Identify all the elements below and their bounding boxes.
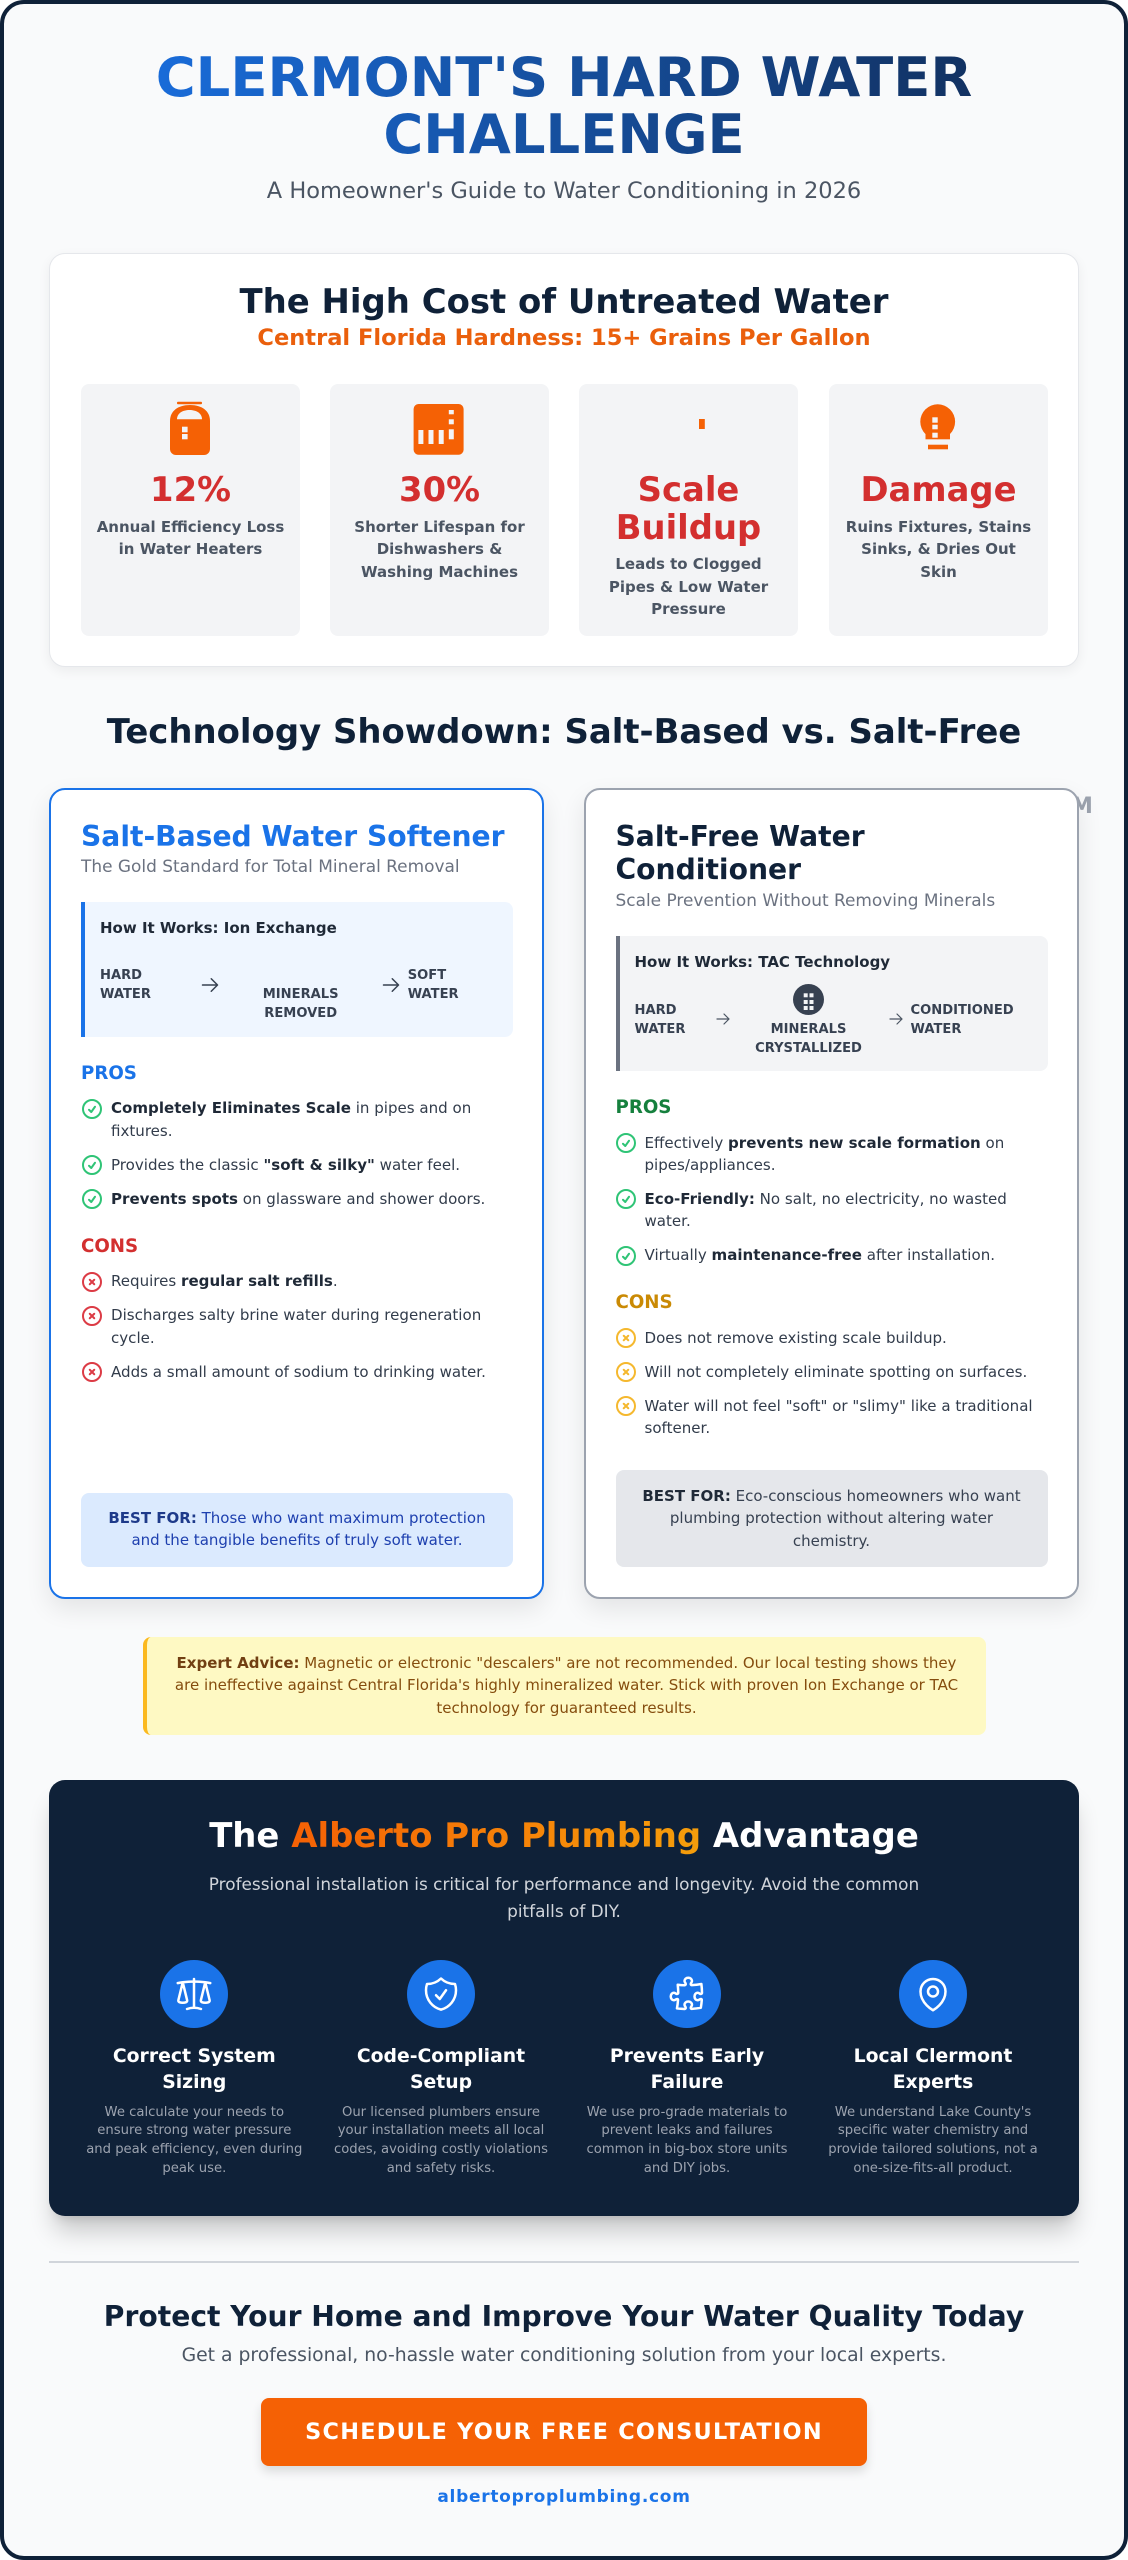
intro text: pitfalls of DIY.	[507, 1901, 621, 1921]
arrow	[716, 1013, 730, 1025]
feature text: We understand Lake County's	[835, 2104, 1031, 2120]
feature text: and peak efficiency, even during	[86, 2142, 302, 2157]
feature: code compliant	[334, 1960, 548, 2176]
description: Washing Machines	[361, 563, 518, 581]
con item	[616, 1396, 1033, 1437]
feature title	[820, 2044, 1046, 2096]
best for callout: BEST FOR: Those who want maximum protection	[108, 1509, 486, 1527]
flow step: hard water	[634, 1003, 686, 1037]
feature text: specific water chemistry and	[838, 2123, 1028, 2138]
card title: Conditioner	[616, 853, 801, 886]
icon: scale	[160, 1960, 228, 2028]
flow step: soft water: SOFT	[408, 968, 446, 983]
value: Buildup	[616, 508, 761, 547]
description: Shorter Lifespan for	[354, 518, 525, 536]
feature title: Code-Compliant	[357, 2046, 525, 2066]
description: Pipes & Low Water	[609, 578, 768, 596]
feature title	[574, 2044, 800, 2096]
clipped letter behind card: M	[1071, 794, 1093, 819]
feature text: codes, avoiding costly violations	[334, 2142, 548, 2157]
feature title: Correct System	[113, 2046, 276, 2066]
icon: pipe mark	[699, 419, 705, 429]
arrow	[382, 978, 400, 992]
stat: shorter lifespan	[330, 384, 549, 636]
description: in Water Heaters	[119, 540, 262, 558]
description: Skin	[920, 563, 957, 581]
flow step: hard water: HARD	[100, 968, 142, 983]
panel: advantage	[49, 1780, 1079, 2216]
description: Leads to Clogged	[615, 555, 762, 573]
feature text: and safety risks.	[387, 2161, 495, 2176]
feature text: your installation meets all local	[338, 2123, 544, 2138]
how it works title: How It Works: TAC Technology	[634, 953, 890, 971]
pro item: Eco-Friendly: No salt, no electricity, no wasted	[644, 1190, 1007, 1208]
flow step: minerals removed: REMOVED	[264, 1006, 337, 1021]
how it works title: How It Works: Ion Exchange	[100, 919, 337, 937]
feature text	[86, 2104, 302, 2176]
feature title	[113, 2046, 276, 2093]
feature: local experts	[820, 1960, 1046, 2192]
feature text	[328, 2104, 554, 2179]
icon: water heater	[170, 402, 210, 455]
description: Sinks, & Dries Out	[861, 540, 1016, 558]
call to action	[49, 2290, 1079, 2520]
value	[616, 470, 761, 547]
flow step: hard water: HARD	[634, 1003, 677, 1018]
cta text: Get a professional, no-hassle water conditioning solution from your local experts.	[182, 2345, 946, 2366]
flow step: minerals removed	[263, 987, 339, 1021]
best for callout	[616, 1470, 1048, 1567]
card subtitle: The Gold Standard for Total Mineral Removal	[81, 856, 460, 876]
best for callout: BEST FOR: Eco-conscious homeowners who want	[642, 1486, 1021, 1504]
icon: shield	[407, 1960, 475, 2028]
pro item: Virtually maintenance-free after installation.	[644, 1246, 995, 1264]
description: Dishwashers &	[377, 540, 502, 558]
description	[96, 518, 284, 558]
value: 12%	[150, 470, 231, 509]
cons heading: CONS	[616, 1292, 673, 1313]
cta button	[261, 2398, 867, 2466]
feature title: Experts	[893, 2072, 973, 2093]
flow step: minerals removed: MINERALS	[263, 987, 339, 1002]
icon: map pin	[899, 1960, 967, 2028]
card title: Salt-Based Water Softener	[81, 820, 505, 852]
feature text: prevent leaks and failures	[601, 2123, 773, 2138]
description	[609, 555, 768, 618]
description: Annual Efficiency Loss	[97, 518, 284, 536]
cta button: SCHEDULE YOUR FREE CONSULTATION	[305, 2419, 823, 2445]
card subtitle: Scale Prevention Without Removing Minerals	[616, 890, 995, 910]
feature text: We calculate your needs to	[105, 2104, 284, 2120]
arrow	[202, 978, 218, 992]
stat: efficiency loss	[81, 384, 300, 636]
feature text: common in big-box store units	[586, 2142, 788, 2157]
best for callout: plumbing protection without altering water	[670, 1509, 993, 1527]
feature text	[574, 2104, 800, 2179]
pro item	[82, 1099, 471, 1140]
value: 30%	[399, 470, 480, 509]
how it works	[81, 902, 513, 1037]
best for callout	[81, 1493, 513, 1567]
subheading: Central Florida Hardness: 15+ Grains Per Gallon	[257, 325, 871, 351]
card title	[616, 820, 865, 886]
feature: early failure	[574, 1960, 800, 2192]
expert advice callout	[143, 1637, 986, 1735]
description	[846, 518, 1031, 581]
expert advice callout: technology for guaranteed results.	[436, 1699, 697, 1717]
pros heading: PROS	[81, 1063, 137, 1084]
panel: salt-free conditioner	[584, 788, 1079, 1599]
pro item: Provides the classic "soft & silky" water feel.	[111, 1156, 460, 1174]
intro text: Professional installation is critical for performance and longevity. Avoid the common	[209, 1874, 919, 1894]
description	[354, 518, 525, 581]
flow step: conditioned water: CONDITIONED	[910, 1003, 1014, 1018]
title	[49, 50, 1079, 163]
arrow	[889, 1013, 903, 1025]
pro item: fixtures.	[111, 1122, 173, 1140]
flow step: minerals crystallized	[755, 1022, 862, 1056]
con item: Does not remove existing scale buildup.	[644, 1328, 947, 1346]
flow step: hard water: WATER	[100, 987, 151, 1002]
pro item	[616, 1133, 1004, 1174]
flow step: conditioned water	[910, 1003, 1014, 1037]
cons heading: CONS	[81, 1236, 138, 1257]
description: Pressure	[651, 600, 726, 618]
feature text: peak use.	[162, 2161, 226, 2176]
feature title: Local Clermont	[854, 2046, 1012, 2066]
pro item: Prevents spots on glassware and shower doors.	[111, 1190, 485, 1208]
feature text: ensure strong water pressure	[97, 2123, 291, 2138]
con item: softener.	[644, 1419, 710, 1437]
pro item	[616, 1189, 1007, 1230]
card title: Salt-Free Water	[616, 820, 865, 852]
value: Damage	[860, 470, 1016, 509]
con item	[82, 1306, 481, 1347]
feature title: Failure	[651, 2072, 723, 2093]
feature title: Prevents Early	[610, 2046, 764, 2066]
flow step: soft water: WATER	[408, 987, 459, 1002]
subtitle: A Homeowner's Guide to Water Conditioning in 2026	[267, 178, 861, 204]
pro item: water.	[644, 1212, 691, 1230]
con item: Water will not feel "soft" or "slimy" like a traditional	[644, 1396, 1033, 1414]
title: CLERMONT'S HARD WATER	[156, 46, 972, 109]
icon: bulb	[920, 404, 956, 450]
icon: puzzle	[653, 1960, 721, 2028]
con item: Requires regular salt refills.	[111, 1272, 338, 1290]
icon: crystals	[793, 984, 824, 1015]
con item: Will not completely eliminate spotting on surfaces.	[644, 1362, 1027, 1380]
flow step: hard water: WATER	[634, 1022, 685, 1037]
feature title: Sizing	[162, 2072, 226, 2093]
pro item: Completely Eliminates Scale in pipes and on	[111, 1099, 471, 1117]
heading: The Alberto Pro Plumbing Advantage	[209, 1816, 919, 1855]
flow step: minerals crystallized: MINERALS	[771, 1022, 846, 1037]
icon: dishwasher	[414, 404, 464, 455]
con item: Discharges salty brine water during regeneration	[111, 1306, 481, 1324]
expert advice callout: are ineffective against Central Florida's highly mineralized water. Stick with proven Ion Exchange or TAC	[175, 1676, 958, 1694]
con item: Adds a small amount of sodium to drinking water.	[111, 1362, 486, 1380]
cta heading: Protect Your Home and Improve Your Water Quality Today	[104, 2300, 1024, 2333]
description: Ruins Fixtures, Stains	[846, 518, 1031, 536]
feature text: We use pro-grade materials to	[587, 2104, 787, 2120]
flow step: soft water	[408, 968, 459, 1002]
best for callout: chemistry.	[793, 1532, 870, 1550]
expert advice callout: Expert Advice: Magnetic or electronic "descalers" are not recommended. Our local testing shows they	[177, 1654, 956, 1672]
website link: albertoproplumbing.com	[437, 2487, 691, 2507]
flow step: minerals crystallized: CRYSTALLIZED	[755, 1041, 862, 1056]
panel: cost of untreated water	[49, 253, 1079, 667]
pros heading: PROS	[616, 1096, 671, 1118]
panel: salt-based softener	[49, 788, 544, 1599]
intro text	[209, 1874, 919, 1921]
how it works	[616, 936, 1048, 1071]
feature text	[820, 2104, 1046, 2179]
header	[156, 46, 972, 204]
feature text: one-size-fits-all product.	[853, 2161, 1013, 2176]
pro item: Effectively prevents new scale formation on	[644, 1134, 1004, 1152]
best for callout: and the tangible benefits of truly soft water.	[131, 1531, 463, 1549]
feature title	[328, 2044, 554, 2096]
section heading: Technology Showdown: Salt-Based vs. Salt-Free	[107, 712, 1021, 751]
stat: damage	[829, 384, 1048, 636]
feature: sizing	[86, 1960, 302, 2176]
heading: The High Cost of Untreated Water	[240, 282, 888, 321]
flow step: hard water	[100, 968, 151, 1002]
value: Scale	[638, 470, 739, 509]
flow step: conditioned water: WATER	[910, 1022, 961, 1037]
pro item: pipes/appliances.	[644, 1156, 776, 1174]
feature text: provide tailored solutions, not a	[828, 2142, 1038, 2157]
feature text: and DIY jobs.	[644, 2161, 730, 2176]
con item: cycle.	[111, 1329, 155, 1347]
feature title: Setup	[410, 2072, 472, 2093]
feature text: Our licensed plumbers ensure	[342, 2104, 540, 2120]
title: CHALLENGE	[383, 103, 745, 166]
stat: scale buildup	[579, 384, 798, 636]
